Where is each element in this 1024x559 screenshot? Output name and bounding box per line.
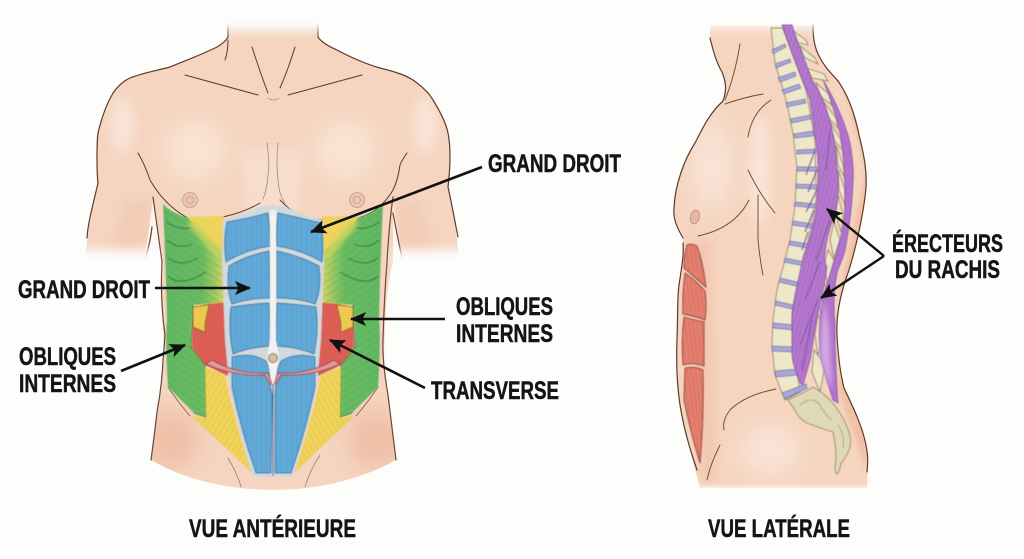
arrow: grand droit left — [155, 287, 250, 289]
rectus fibres — [225, 213, 323, 473]
skin: lateral body — [674, 25, 868, 488]
erector tendon slips — [800, 130, 830, 370]
erector spinae muscles — [782, 25, 853, 403]
arrow: grand droit upper — [311, 167, 482, 232]
outer erector strand — [819, 80, 853, 403]
caption: vue antérieure: VUE ANTÉRIEURE — [189, 514, 356, 543]
arrows: érecteurs du rachis — [821, 209, 884, 298]
vertebral bodies — [771, 28, 816, 400]
skin: torso and arms — [85, 20, 459, 490]
spinous processes — [793, 31, 845, 392]
arrow: obliques internes left — [121, 345, 185, 371]
label: obliques internes right — [456, 293, 553, 348]
muscle group: left obliques, transverse — [163, 204, 252, 473]
label: obliques internes left — [19, 343, 116, 398]
spine: vertebral column — [771, 28, 851, 474]
sacrum and coccyx — [788, 387, 851, 474]
arrow: obliques internes right — [351, 318, 445, 320]
rectus abdominis side segments — [682, 244, 706, 463]
label: transverse: TRANSVERSE — [431, 377, 559, 405]
label: grand droit left: GRAND DROIT — [18, 276, 150, 304]
fades at neck and arms — [65, 0, 475, 503]
arrow: transverse — [330, 340, 425, 388]
label: obliques internes right: OBLIQUES — [456, 293, 553, 321]
linea alba and navel — [267, 210, 279, 476]
label: érecteurs du rachis — [892, 229, 1003, 284]
body outlines — [87, 25, 458, 487]
figure: anterior view torso — [86, 24, 459, 490]
body outline — [674, 25, 868, 480]
label: grand droit upper: GRAND DROIT — [488, 150, 621, 178]
label: obliques internes left: OBLIQUES — [19, 343, 116, 371]
skin shading — [690, 80, 875, 480]
nipples — [182, 192, 364, 208]
main erector fibres — [782, 25, 838, 385]
label: obliques internes right: INTERNES — [456, 320, 553, 348]
figure: lateral view torso — [673, 24, 868, 488]
rectus abdominis blocks — [225, 213, 323, 473]
transverse lower strap — [206, 360, 340, 384]
fades at neck and hip — [680, 0, 880, 503]
muscles: abdominal wall — [163, 204, 383, 477]
rectus sheath — [222, 206, 324, 477]
main erector column — [782, 25, 838, 385]
nipple — [689, 209, 701, 225]
sacrum contours — [800, 400, 843, 448]
label: obliques internes left: INTERNES — [19, 370, 116, 398]
muscle group: right obliques, transverse — [294, 204, 383, 473]
caption: vue latérale: VUE LATÉRALE — [708, 514, 850, 543]
intervertebral discs — [772, 44, 817, 399]
outer erector highlight — [820, 300, 832, 390]
